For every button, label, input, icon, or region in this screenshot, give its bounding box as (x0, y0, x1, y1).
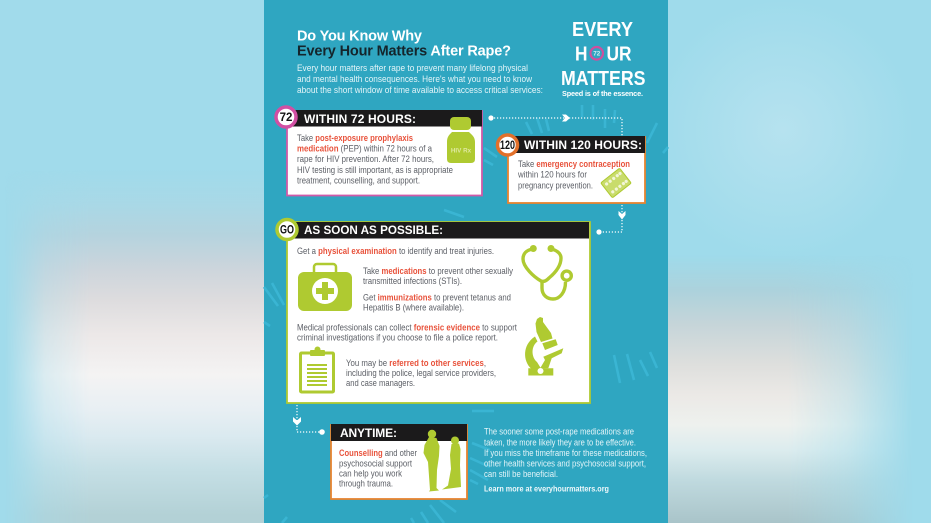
connector: 120 to go (596, 205, 626, 235)
body text: treatment, counselling, and support. (297, 176, 420, 186)
text: immunizations: Hepatitis B (where available). (363, 302, 464, 312)
text: physical examination: Get a physical examination to identify and treat injuries. (297, 246, 494, 256)
intro paragraph: and mental health consequences. Here's what you need to know (297, 74, 533, 84)
body text (297, 133, 453, 186)
panel: anytime: ANYTIME: (340, 426, 397, 440)
logo: Every Hour Matters: MATTERS (561, 68, 646, 90)
panel: within 120 hours: WITHIN 120 HOURS: (524, 138, 642, 152)
title: Every Hour Matters After Rape? (297, 44, 511, 60)
badge: 120 (498, 135, 518, 155)
learn more link text: Learn more at everyhourmatters.org (484, 484, 609, 494)
icon: pill pack (601, 168, 631, 198)
icon: HIV Rx bottle: HIV Rx (451, 148, 472, 154)
body text: HIV testing is still important, as is appropriate (297, 165, 453, 175)
body text: Counselling and other (339, 448, 417, 458)
panel: within 72 hours (276, 107, 482, 196)
blurred background left (10, 194, 264, 523)
body text: can help you work (339, 468, 403, 478)
body text (339, 448, 417, 488)
badge: go (277, 220, 297, 240)
icon: stethoscope (523, 245, 571, 299)
connector: go to anytime (293, 405, 325, 435)
badge: 72: 72 (280, 112, 292, 124)
logo: Every Hour Matters (561, 19, 646, 98)
body text: psychosocial support (339, 458, 412, 468)
text: referrals (346, 358, 496, 388)
text: medications: Take medications to prevent other sexually (363, 266, 514, 276)
body text: rape for HIV prevention. After 72 hours, (297, 154, 434, 164)
text: immunizations: Get immunizations to prevent tetanus and (363, 292, 511, 302)
panel: as soon as possible (277, 220, 590, 403)
icon: first aid case (298, 264, 352, 311)
panel: as soon as possible: AS SOON AS POSSIBLE: (304, 223, 443, 237)
text: immunizations (363, 292, 511, 312)
intro paragraph: about the short window of time available to access critical services: (297, 85, 543, 95)
body text: Take emergency contraception (518, 159, 630, 169)
intro paragraph: Every hour matters after rape to prevent many lifelong physical (297, 63, 528, 73)
title: Do You Know Why (297, 28, 422, 44)
body text (517, 159, 630, 190)
closing note: The sooner some post-rape medications are (484, 426, 634, 436)
body text: within 120 hours for (517, 170, 587, 180)
closing note: can still be beneficial. (484, 469, 558, 479)
intro paragraph (297, 63, 543, 95)
blurred background right (668, 46, 902, 523)
logo: Every Hour Matters: EVERY (572, 19, 634, 41)
logo: Every Hour Matters: Speed is of the essence. (562, 89, 643, 98)
title (297, 28, 511, 60)
closing note: If you miss the timeframe for these medications, (484, 448, 647, 458)
closing note: taken, the more likely they are to be effective. (484, 438, 636, 448)
text: referrals: You may be referred to other services, (346, 358, 486, 368)
body text: medication (PEP) within 72 hours of a (297, 144, 432, 154)
body text: Take post-exposure prophylaxis (297, 133, 413, 143)
text: medications: transmitted infections (STIs). (363, 276, 462, 286)
badge: 120: 120 (500, 140, 515, 152)
body text: pregnancy prevention. (518, 180, 593, 190)
connector: 72 to 120 (488, 114, 622, 136)
badge: go: GO (280, 224, 294, 236)
icon: microscope (525, 317, 563, 376)
icon: HIV Rx bottle (447, 117, 475, 163)
text: medications (363, 266, 514, 286)
text: referrals: including the police, legal service providers, (346, 368, 496, 378)
panel: within 120 hours (498, 135, 645, 203)
text: forensic evidence: criminal investigations if you choose to file a police report. (297, 332, 498, 342)
badge: 72 (276, 107, 296, 127)
icon: two silhouettes (424, 430, 461, 492)
text: forensic evidence: Medical professionals can collect forensic evidence to support (297, 322, 517, 332)
panel: teal poster background (264, 0, 668, 523)
closing note: other health services and psychosocial support, (484, 458, 646, 468)
panel: anytime (331, 424, 467, 499)
icon: clipboard (300, 346, 334, 392)
closing note (484, 426, 647, 494)
panel: within 72 hours: WITHIN 72 HOURS: (304, 112, 416, 126)
logo clock circle: 72 (593, 51, 601, 58)
body text: through trauma. (339, 478, 393, 488)
logo: Every Hour Matters: H (575, 44, 588, 66)
text: referrals: and case managers. (346, 378, 415, 388)
text: forensic evidence (297, 322, 517, 342)
logo: Every Hour Matters: UR (606, 44, 632, 66)
